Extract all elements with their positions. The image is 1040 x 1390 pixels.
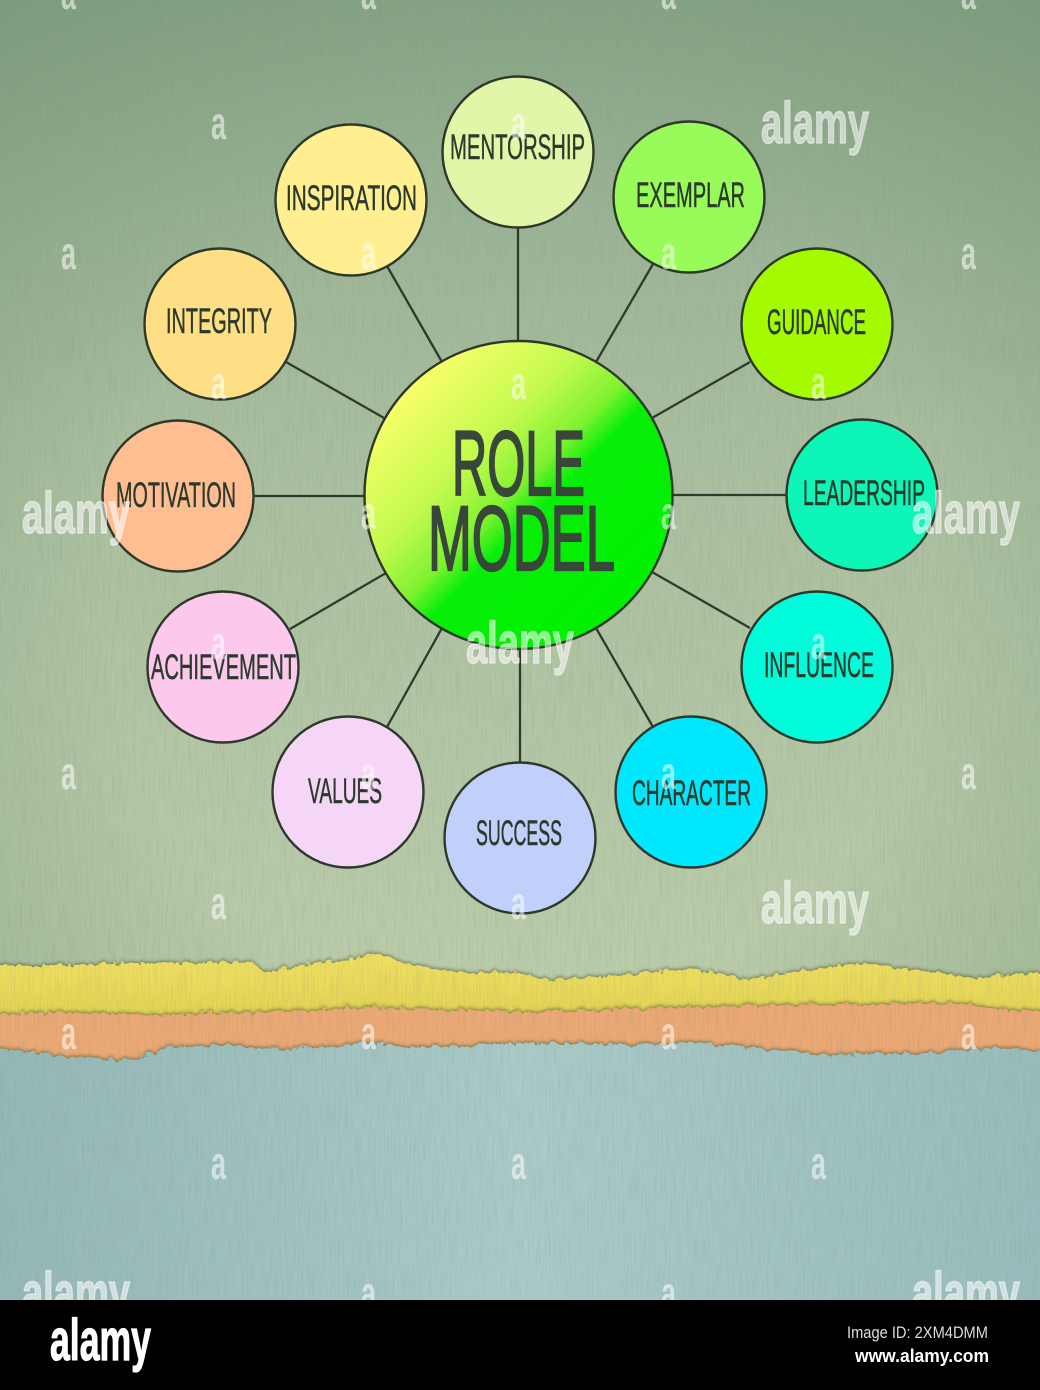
- node: inspiration: [276, 124, 426, 276]
- watermark layer: a: [61, 1007, 76, 1059]
- watermark layer: a: [661, 227, 676, 279]
- node: character: CHARACTER: [632, 774, 751, 813]
- node: success: SUCCESS: [476, 814, 562, 853]
- node: success: [444, 762, 596, 914]
- watermark layer: a: [211, 877, 226, 929]
- watermark layer: a: [811, 357, 826, 409]
- node: integrity: [144, 248, 296, 400]
- node: motivation: [102, 420, 254, 572]
- watermark layer: a: [211, 617, 226, 669]
- torn paper strips: [0, 954, 1040, 1310]
- node: exemplar: EXEMPLAR: [636, 176, 745, 215]
- yellow strip: [0, 954, 1040, 1030]
- node: guidance: [742, 248, 892, 400]
- watermark layer: a: [661, 747, 676, 799]
- blue paper: [0, 1042, 1040, 1310]
- title: model: MODEL: [428, 488, 615, 590]
- watermark layer: a: [361, 1267, 376, 1319]
- node: character: [616, 716, 766, 868]
- node: guidance: GUIDANCE: [767, 303, 866, 342]
- node: motivation: MOTIVATION: [116, 476, 236, 515]
- watermark layer: a: [361, 1007, 376, 1059]
- node: values: [272, 716, 424, 868]
- node: achievement: ACHIEVEMENT: [151, 648, 296, 687]
- watermark layer: a: [961, 227, 976, 279]
- node: mentorship: MENTORSHIP: [450, 128, 585, 167]
- node: integrity: INTEGRITY: [166, 302, 272, 341]
- watermark layer: alamy: [761, 871, 869, 936]
- watermark layer: a: [661, 1007, 676, 1059]
- black footer bar: [0, 1300, 1040, 1390]
- green paper background: [0, 0, 1040, 1000]
- watermark layer: alamy: [22, 481, 130, 546]
- watermark layer: a: [61, 227, 76, 279]
- node: influence: INFLUENCE: [764, 646, 874, 685]
- watermark layer: a: [661, 487, 676, 539]
- watermark layer: alamy: [466, 611, 574, 676]
- watermark layer: a: [511, 877, 526, 929]
- node: influence: [742, 592, 892, 742]
- watermark layer: a: [61, 747, 76, 799]
- watermark layer: a: [361, 487, 376, 539]
- watermark layer: a: [961, 747, 976, 799]
- node: mentorship: [442, 76, 594, 228]
- title: role: ROLE: [452, 413, 585, 515]
- watermark layer: a: [511, 1137, 526, 1189]
- watermark layer: a: [511, 357, 526, 409]
- watermark layer: a: [961, 1007, 976, 1059]
- watermark layer: a: [661, 1267, 676, 1319]
- node: inspiration: INSPIRATION: [286, 179, 417, 218]
- website: www.alamy.com: [854, 1346, 989, 1366]
- image id: Image ID: 2XM4DMM: [847, 1323, 988, 1342]
- node: exemplar: [614, 122, 764, 272]
- watermark layer: alamy: [761, 91, 869, 156]
- watermark layer: a: [511, 97, 526, 149]
- footer logo: alamy: [50, 1308, 151, 1373]
- node: leadership: [786, 420, 938, 570]
- node: values: VALUES: [308, 772, 382, 811]
- watermark layer: a: [211, 357, 226, 409]
- central circle: role model: [364, 341, 672, 649]
- watermark layer: a: [361, 747, 376, 799]
- orange strip: [0, 1003, 1040, 1070]
- watermark layer: a: [811, 617, 826, 669]
- watermark layer: a: [211, 1137, 226, 1189]
- node: leadership: LEADERSHIP: [803, 474, 925, 513]
- watermark layer: a: [811, 1137, 826, 1189]
- watermark layer: a: [211, 97, 226, 149]
- node: achievement: [148, 592, 298, 742]
- watermark layer: alamy: [22, 1261, 130, 1326]
- connector lines: [252, 225, 790, 765]
- watermark layer: a: [361, 227, 376, 279]
